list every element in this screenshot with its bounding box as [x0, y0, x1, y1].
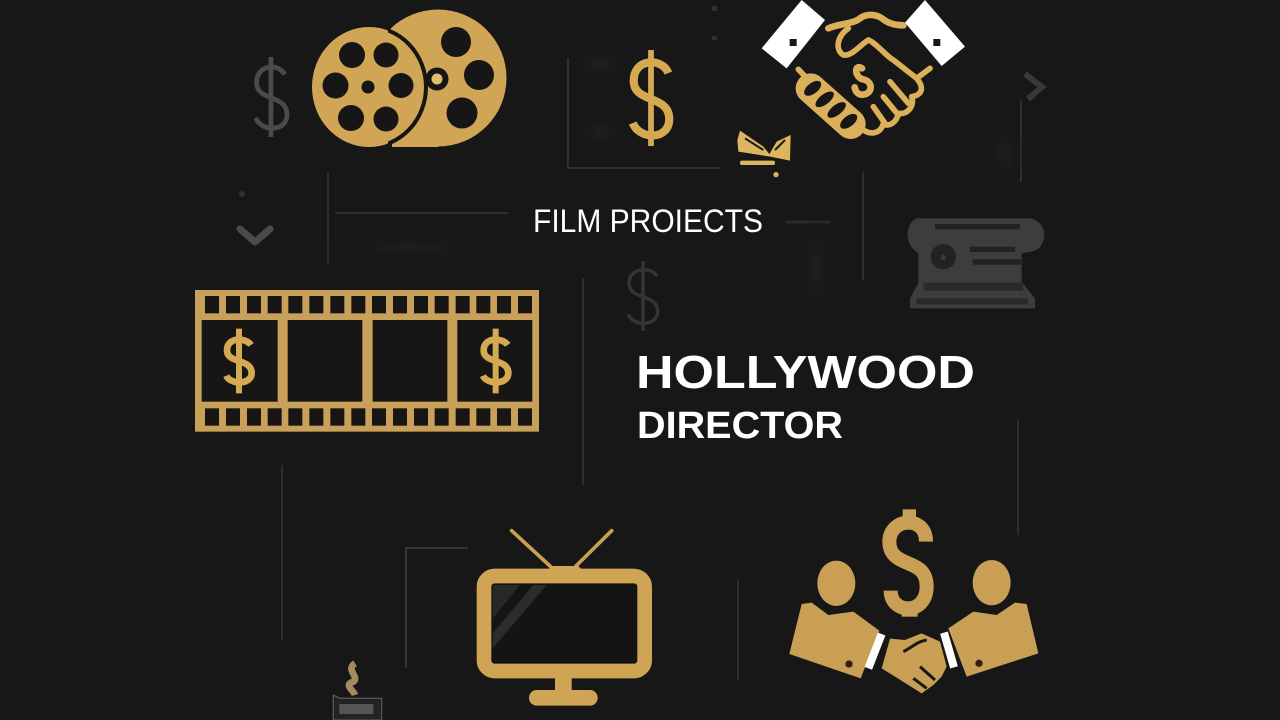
white cuffs	[868, 633, 954, 668]
icon: television	[484, 531, 645, 706]
icon: business handshake with dollar	[789, 509, 1038, 693]
title: hollywood director: DIRECTOR	[637, 405, 843, 447]
label: film projects: FILM PROIECTS	[533, 203, 763, 239]
right person	[948, 560, 1038, 677]
right cuff	[905, 0, 965, 66]
left cuff	[762, 0, 825, 68]
icon: small dollar plant	[333, 663, 382, 720]
icon: chevron right	[1025, 74, 1042, 99]
icon: gold butterfly	[737, 131, 791, 177]
icon: faded dollar top left	[256, 57, 287, 137]
icon: film strip with dollars	[195, 290, 539, 432]
title: hollywood director	[636, 346, 975, 447]
icon: faded column	[907, 218, 1044, 308]
icon: faded dollar centre	[628, 261, 658, 331]
title: hollywood director: HOLLYWOOD	[636, 346, 975, 398]
icon: dollar sign in frame	[633, 50, 669, 146]
icon: handshake with cuffs	[762, 0, 965, 133]
icon: chevron down	[240, 229, 270, 242]
big dollar	[889, 509, 927, 617]
clasped hands	[882, 633, 947, 693]
icon: film reels	[312, 10, 506, 147]
left person	[789, 561, 879, 678]
